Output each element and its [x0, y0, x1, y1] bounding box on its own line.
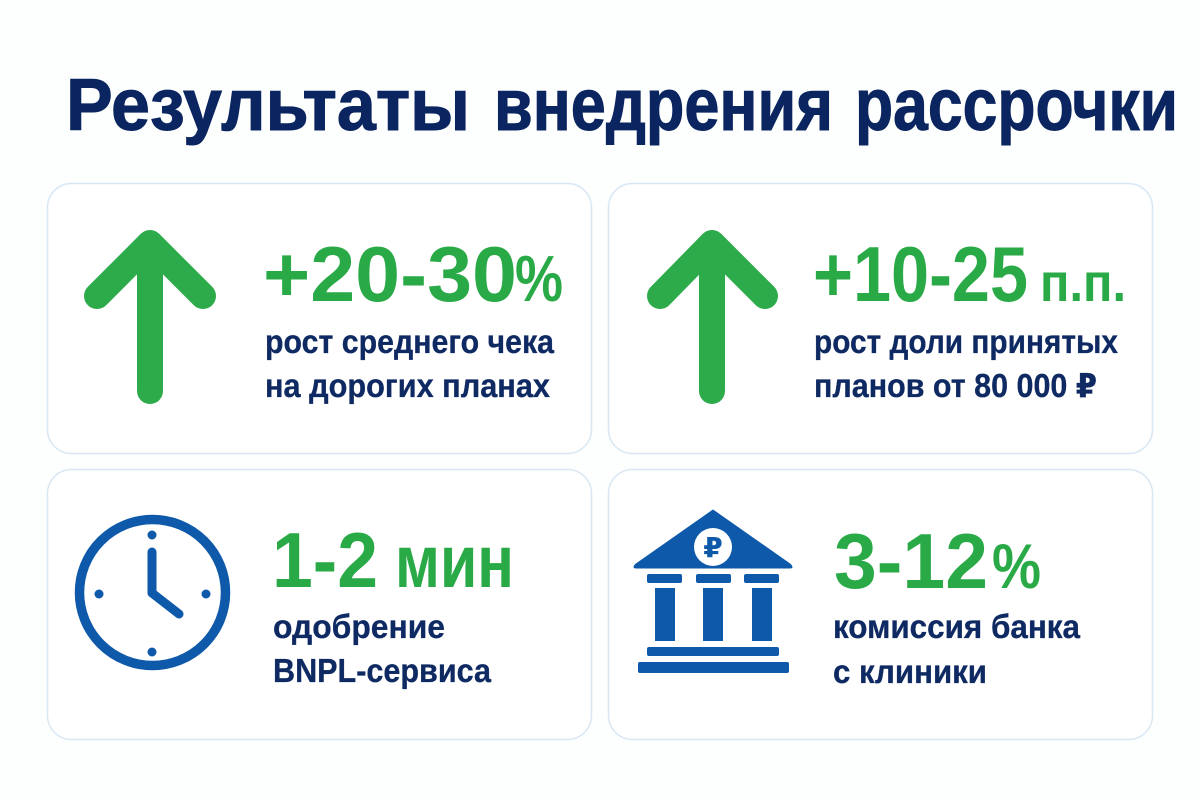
- metric: 3-12%: 3-12: [834, 517, 988, 605]
- text: average check description: [265, 323, 555, 404]
- icon: green up arrow right: [660, 243, 765, 391]
- metric: +20-30%: +20-30: [263, 230, 517, 318]
- metric: 1-2 мин: 1-2: [272, 516, 378, 604]
- icon: green up arrow left: [97, 243, 203, 391]
- metric: +10-25 п.п.: п.п.: [1040, 253, 1126, 313]
- panel: accepted plans: [608, 184, 1152, 454]
- text: approval description: BNPL-сервиса: [273, 652, 492, 689]
- text: average check description: рост среднего чека: [265, 323, 555, 360]
- text: commission description: комиссия банка: [833, 608, 1081, 645]
- panel: bank commission: [608, 470, 1152, 740]
- text: approval description: [273, 608, 492, 689]
- text: approval description: одобрение: [273, 608, 445, 645]
- title: Результаты: [66, 65, 470, 146]
- text: commission description: [833, 608, 1081, 690]
- metric: 1-2 мин: [272, 516, 514, 604]
- icon: bank building: ₽: [703, 532, 723, 563]
- metric: +10-25 п.п.: +10-25: [813, 230, 1028, 318]
- metric: 3-12%: %: [992, 532, 1041, 602]
- title: внедрения: [494, 65, 833, 146]
- icon: bank building: [634, 510, 792, 673]
- text: accepted plans description: рост доли принятых: [814, 323, 1119, 360]
- panel: average check: [48, 184, 592, 454]
- metric: 1-2 мин: мин: [395, 520, 514, 603]
- text: accepted plans description: [814, 323, 1119, 404]
- text: accepted plans description: планов от 80 000 ₽: [814, 367, 1097, 404]
- metric: +20-30%: %: [515, 242, 563, 315]
- text: commission description: с клиники: [833, 653, 987, 690]
- title: [66, 65, 1178, 146]
- panel: approval time: [48, 470, 592, 740]
- icon: clock: [80, 520, 226, 666]
- text: average check description: на дорогих планах: [265, 367, 551, 404]
